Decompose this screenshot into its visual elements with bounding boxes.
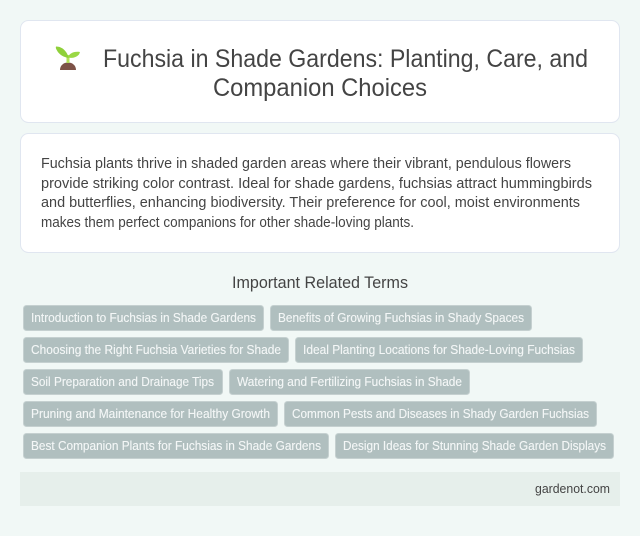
- tag 1: Introduction to Fuchsias in Shade Gardens: [31, 310, 256, 325]
- tag 10: [336, 434, 614, 458]
- tag 2: Benefits of Growing Fuchsias in Shady Spaces: [278, 310, 524, 325]
- tag 4: Ideal Planting Locations for Shade-Loving Fuchsias: [303, 342, 575, 357]
- footer source: gardenot.com: [535, 481, 610, 496]
- title: Companion Choices: [213, 74, 427, 102]
- footer: [20, 472, 620, 506]
- panel: description: [20, 134, 620, 252]
- tag 4: [296, 338, 582, 362]
- tag 5: Soil Preparation and Drainage Tips: [31, 374, 214, 389]
- description text: makes them perfect companions for other shade-loving plants.: [41, 214, 414, 231]
- panel: title card: [20, 20, 620, 122]
- tag 8: [284, 402, 596, 426]
- panel: related term tags: [24, 306, 614, 458]
- tag 9: Best Companion Plants for Fuchsias in Shade Gardens: [31, 438, 321, 453]
- tag 8: Common Pests and Diseases in Shady Garden Fuchsias: [292, 406, 589, 421]
- description text: Fuchsia plants thrive in shaded garden areas where their vibrant, pendulous flowers: [41, 155, 571, 172]
- tag 9: [24, 434, 328, 458]
- tag 5: [24, 370, 222, 394]
- heading: related terms: Important Related Terms: [232, 274, 408, 292]
- tag 1: [24, 306, 264, 330]
- description text: provide striking color contrast. Ideal for shade gardens, fuchsias attract hummingbirds: [41, 175, 592, 192]
- tag 7: Pruning and Maintenance for Healthy Growth: [31, 406, 270, 421]
- tag 10: Design Ideas for Stunning Shade Garden Displays: [343, 438, 606, 453]
- tag 6: [230, 370, 470, 394]
- tag 2: [270, 306, 532, 330]
- tag 6: Watering and Fertilizing Fuchsias in Shade: [237, 374, 462, 389]
- title: Fuchsia in Shade Gardens: Planting, Care, and: [103, 45, 588, 73]
- description text: and butterflies, enhancing biodiversity. Their preference for cool, moist environments: [41, 194, 580, 211]
- tag 7: [24, 402, 278, 426]
- tag 3: [24, 338, 288, 362]
- icon: sprout: [56, 46, 80, 70]
- tag 3: Choosing the Right Fuchsia Varieties for Shade: [31, 342, 281, 357]
